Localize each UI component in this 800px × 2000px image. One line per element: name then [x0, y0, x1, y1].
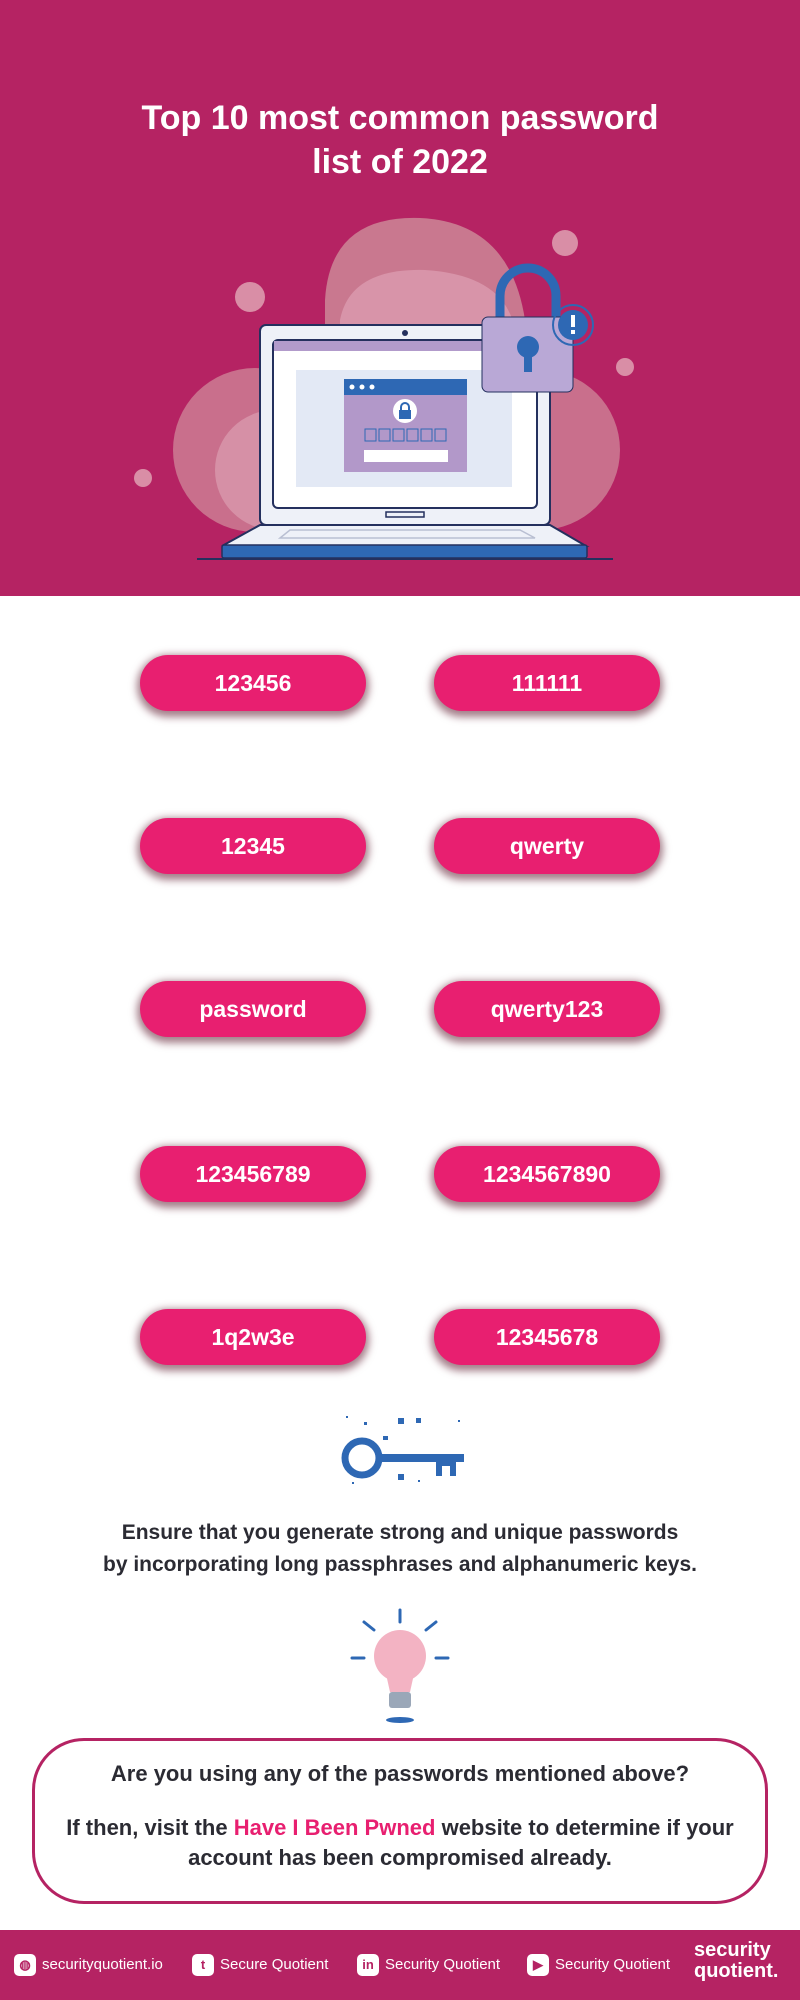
footer: linkedin: Security Quotient [385, 1956, 500, 1973]
footer: website: securityquotient.io [42, 1956, 163, 1973]
title [141, 99, 658, 181]
callout box: account has been compromised already. [188, 1845, 612, 1870]
title: Top 10 most common password [141, 99, 658, 137]
password: qwerty [434, 818, 660, 874]
password: 1234567890 [434, 1146, 660, 1202]
icon: light bulb [350, 1608, 450, 1723]
password: password [140, 981, 366, 1037]
footer: linkedin [357, 1954, 500, 1976]
callout box: If then, visit the Have I Been Pwned website to determine if your [66, 1815, 734, 1840]
password: 123456: 123456 [215, 670, 291, 696]
password: 123456789: 123456789 [195, 1161, 311, 1187]
password: qwerty123: qwerty123 [491, 996, 603, 1022]
footer [0, 1930, 800, 2000]
callout box [32, 1738, 768, 1904]
footer: logo [694, 1939, 778, 1982]
tip text: Ensure that you generate strong and unique passwords [122, 1521, 678, 1544]
tip text: by incorporating long passphrases and alphanumeric keys. [103, 1553, 697, 1576]
password: 12345 [140, 818, 366, 874]
footer: youtube [527, 1954, 670, 1976]
footer: linkedin: in [362, 1957, 374, 1972]
footer: website [14, 1954, 163, 1976]
password: 1q2w3e [140, 1309, 366, 1365]
footer: logo: security [694, 1939, 771, 1961]
illustration: laptop with lock [134, 218, 634, 560]
password: qwerty: qwerty [510, 833, 584, 859]
footer: youtube: Security Quotient [555, 1956, 670, 1973]
icon: key [342, 1416, 464, 1484]
password: 111111: 111111 [512, 670, 582, 696]
footer: logo: quotient. [694, 1960, 778, 1982]
header panel [0, 0, 800, 596]
footer: youtube: ▶ [533, 1957, 543, 1972]
password: 12345678 [434, 1309, 660, 1365]
password: 12345678: 12345678 [496, 1324, 598, 1350]
footer: twitter [192, 1954, 328, 1976]
password: 12345: 12345 [221, 833, 285, 859]
footer: twitter: t [201, 1957, 205, 1972]
password: qwerty123 [434, 981, 660, 1037]
password: 1234567890: 1234567890 [483, 1161, 611, 1187]
password: 123456789 [140, 1146, 366, 1202]
footer: twitter: Secure Quotient [220, 1956, 328, 1973]
footer: website: ◍ [19, 1957, 31, 1972]
title: list of 2022 [312, 143, 488, 181]
password: 123456 [140, 655, 366, 711]
tip text [103, 1521, 697, 1576]
password: password: password [199, 996, 307, 1022]
password: 111111 [434, 655, 660, 711]
callout box: Are you using any of the passwords mentioned above? [111, 1761, 689, 1786]
password: 1q2w3e: 1q2w3e [211, 1324, 295, 1350]
